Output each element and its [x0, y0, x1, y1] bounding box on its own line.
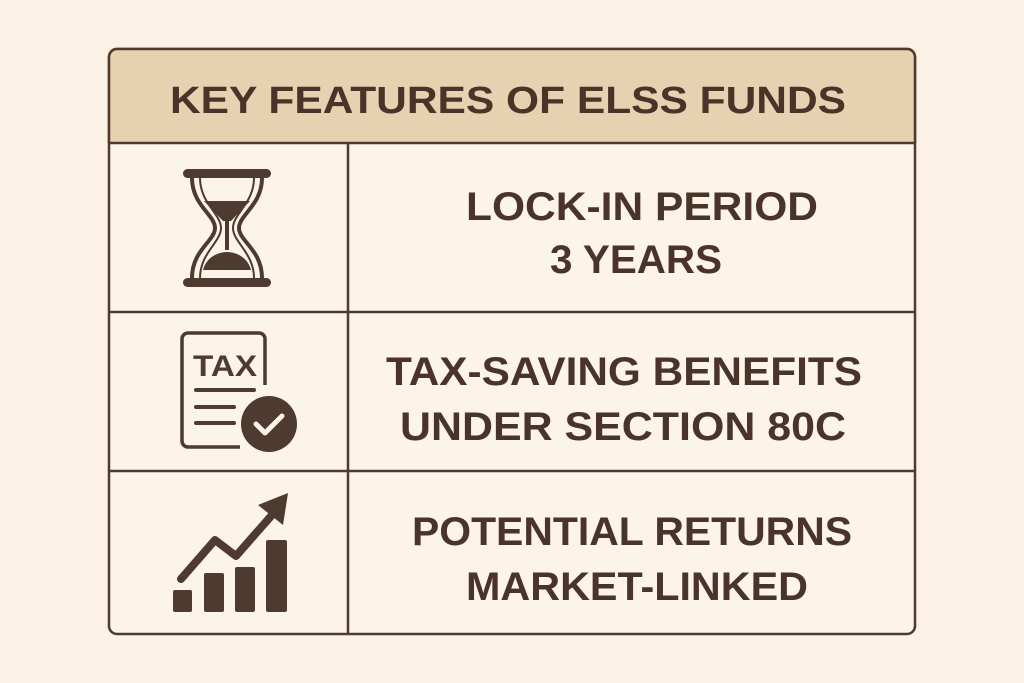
text: lock-in: LOCK-IN PERIOD [466, 185, 818, 229]
icon: tax document: TAX [193, 350, 257, 383]
text: lock-in: 3 YEARS [550, 238, 722, 282]
text: lock-in [466, 185, 818, 282]
text: tax-saving: UNDER SECTION 80C [400, 405, 846, 449]
text: returns: POTENTIAL RETURNS [412, 510, 852, 554]
text: returns: MARKET-LINKED [466, 565, 808, 609]
icon: growth chart [173, 493, 288, 612]
icon: tax document [182, 333, 297, 452]
icon: hourglass [183, 169, 271, 287]
table panel [109, 49, 915, 634]
header band [109, 49, 915, 143]
title: KEY FEATURES OF ELSS FUNDS [170, 80, 846, 122]
text: returns [412, 510, 852, 609]
text: tax-saving [386, 350, 862, 449]
text: tax-saving: TAX-SAVING BENEFITS [386, 350, 862, 394]
